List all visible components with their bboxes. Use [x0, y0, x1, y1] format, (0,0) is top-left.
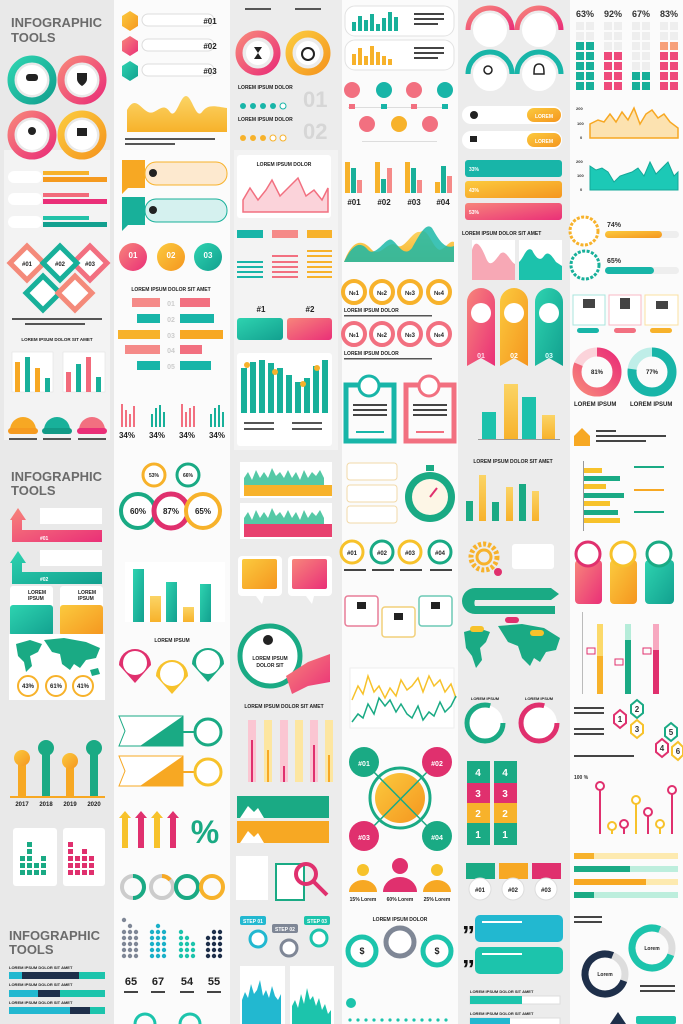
- quote cards: [462, 915, 563, 984]
- stacked numbered blocks: 4: [475, 768, 481, 779]
- world map col5: [464, 617, 560, 668]
- badges progress: [570, 217, 679, 279]
- three label cards: [466, 863, 561, 900]
- steps diagram: [240, 916, 330, 956]
- people icons: [349, 858, 451, 903]
- people icons: 25% Lorem: [424, 897, 451, 903]
- grouped bars #01-#04: #03: [407, 198, 421, 207]
- No. circles rows: №4: [434, 290, 445, 297]
- badges progress: 74%: [607, 222, 622, 229]
- hub diagram: #02: [431, 761, 443, 768]
- badges progress: 65%: [607, 258, 622, 265]
- zigzag chart card: [237, 155, 331, 218]
- arrows #01 #02: #01: [40, 536, 49, 542]
- year pillars: 2019: [63, 802, 77, 808]
- donut rings percentages: [121, 464, 220, 528]
- donuts 81% 77%: LOREM IPSUM: [574, 402, 616, 408]
- hub diagram: #04: [431, 835, 443, 842]
- bar chart col5: [466, 459, 553, 521]
- icon circles panel: [11, 59, 103, 156]
- No. circles rows: LOREM IPSUM DOLOR: [344, 351, 399, 357]
- title: infographic tools 2: [11, 469, 103, 498]
- percent squares grid: 83%: [660, 9, 678, 19]
- grouped bars #01-#04: #01: [347, 198, 361, 207]
- percentage rows: 02: [167, 317, 175, 324]
- three label cards: #01: [475, 888, 486, 894]
- icon cards three: [573, 295, 678, 333]
- stopwatch numbers: #02: [377, 551, 388, 557]
- donuts 81% 77%: 77%: [646, 370, 659, 376]
- mini bar groups 34%: 34%: [179, 431, 195, 440]
- C donuts: Lorem: [597, 972, 613, 978]
- diamonds panel: #03: [85, 262, 96, 268]
- lorem ipsum cards: LOREM: [78, 590, 96, 596]
- quote cards: ”: [462, 954, 475, 984]
- triangle ribbons with icons: [119, 716, 221, 786]
- people icons: 15% Lorem: [350, 897, 377, 903]
- segmented progress: LOREM IPSUM DOLOR SIT AMET: [470, 989, 534, 994]
- segmented bars: LOREM IPSUM DOLOR SIT AMET: [9, 982, 73, 987]
- dot columns 65 67 54 55: 55: [208, 976, 220, 988]
- donut rings percentages: 66%: [183, 473, 194, 479]
- arrows #01 #02: [10, 508, 102, 584]
- banners: 53%: [469, 210, 480, 216]
- hexagons 1-6: 5: [669, 728, 674, 737]
- circular arrows: [467, 696, 557, 741]
- stacked numbered blocks: 1: [475, 830, 481, 841]
- ribbon banners 01 02 03: [467, 288, 563, 366]
- gear icon: [471, 544, 554, 576]
- twin area charts: [462, 231, 562, 280]
- dollar rings: $: [434, 946, 440, 956]
- pin timeline: [344, 82, 453, 142]
- house icon: [574, 428, 666, 446]
- title: infographic tools 1: TOOLS: [11, 30, 56, 45]
- dollar rings: $: [359, 946, 365, 956]
- circular arrows: LOREM IPSUM: [471, 696, 500, 701]
- orange line area chart: 100: [577, 121, 584, 126]
- lollipop chart: [574, 775, 676, 834]
- dots 01 02: LOREM IPSUM DOLOR: [238, 117, 293, 123]
- year pillars: 2020: [87, 802, 101, 808]
- teal line area chart: 0: [580, 187, 583, 192]
- teal bar chart card: [237, 353, 332, 446]
- text boxes and stopwatch: [347, 463, 455, 523]
- orange line area chart: 0: [580, 135, 583, 140]
- #1 #2 cards: [237, 305, 332, 340]
- numbered circles: 01: [129, 251, 138, 260]
- lorem ipsum cards: [10, 586, 103, 636]
- mini bar groups 34%: [119, 404, 225, 440]
- dots 01 02: LOREM IPSUM DOLOR: [238, 85, 293, 91]
- No. circles rows: №3: [405, 290, 416, 297]
- vertical percentage bars: LOREM IPSUM DOLOR SIT AMET: [244, 704, 324, 710]
- bar cards col4: [345, 6, 454, 70]
- diamonds panel: [10, 246, 107, 325]
- orange line area chart: [576, 106, 678, 140]
- hexagons 1-6: [574, 700, 683, 760]
- twin area charts: LOREM IPSUM DOLOR SIT AMET: [462, 231, 541, 237]
- dot grid cards: [13, 828, 105, 886]
- dots 01 02: [238, 85, 327, 144]
- up arrows and percent sign: %: [191, 814, 219, 850]
- percentage rows: LOREM IPSUM DOLOR SIT AMET: [131, 287, 211, 293]
- banners: 43%: [469, 188, 480, 194]
- bar chart 4 bars: [478, 384, 560, 440]
- pins panel: [8, 417, 107, 440]
- segmented bars: LOREM IPSUM DOLOR SIT AMET: [9, 1000, 73, 1005]
- dollar rings: LOREM IPSUM DOLOR: [373, 917, 428, 923]
- cyan area charts: [240, 966, 334, 1024]
- stacked numbered blocks: 3: [475, 789, 481, 800]
- hub diagram: #01: [358, 761, 370, 768]
- donut rings percentages: 53%: [149, 473, 160, 479]
- title: infographic tools 1: INFOGRAPHIC: [11, 15, 103, 30]
- hexagons 1-6: 2: [635, 705, 640, 714]
- ribbon banners 01 02 03: 01: [477, 353, 485, 360]
- teal line area chart: 100: [577, 173, 584, 178]
- hexagons 1-6: 6: [676, 747, 681, 756]
- stopwatch numbers: #04: [435, 551, 446, 557]
- world map: 41%: [77, 684, 90, 690]
- year pillars: 2018: [39, 802, 53, 808]
- lorem ipsum cards: IPSUM: [28, 596, 44, 602]
- stacked numbered blocks: 3: [502, 789, 508, 800]
- donuts 81% 77%: LOREM IPSUM: [630, 402, 672, 408]
- C donuts: Lorem: [644, 946, 660, 952]
- donut rings percentages: 65%: [195, 507, 211, 516]
- ribbon banners 01 02 03: 02: [510, 353, 518, 360]
- big circle with arrow: [240, 626, 330, 694]
- diamonds panel: #02: [55, 262, 66, 268]
- dot columns 65 67 54 55: 54: [181, 976, 194, 988]
- big circle with arrow: LOREM IPSUM: [252, 656, 288, 662]
- yellow area chart: [125, 96, 227, 145]
- percentage rows: 04: [167, 348, 175, 355]
- No. circles rows: №1: [349, 290, 360, 297]
- pin markers: [119, 638, 224, 694]
- percent squares grid: 92%: [604, 9, 622, 19]
- percentage rows: 05: [167, 364, 175, 371]
- cubes list: #03: [203, 67, 217, 76]
- dots 01 02: 02: [303, 119, 327, 144]
- banners: 33%: [469, 167, 480, 173]
- mountain banners: [237, 796, 329, 843]
- timer gauges: [239, 8, 327, 72]
- horizontal bar chart col6: [583, 461, 664, 531]
- mini bar groups 34%: 34%: [119, 431, 135, 440]
- bar chart teal/orange: [125, 562, 225, 622]
- bar charts panel: [12, 337, 105, 392]
- teal line area chart: 200: [576, 159, 583, 164]
- progress bars col6: [574, 853, 678, 898]
- year pillars: 2017: [15, 802, 29, 808]
- donuts 81% 77%: [574, 352, 672, 408]
- stacked numbered blocks: 1: [502, 830, 508, 841]
- title: infographic tools 2: TOOLS: [11, 483, 56, 498]
- lorem ipsum cards: LOREM: [28, 590, 46, 596]
- stacked numbered blocks: 2: [475, 809, 481, 820]
- grouped bars #01-#04: #02: [377, 198, 391, 207]
- lollipop chart: 100 %: [574, 775, 589, 781]
- banners: [465, 160, 562, 220]
- horizontal bars panel: [8, 171, 107, 228]
- No. circles rows: [343, 281, 450, 360]
- title: infographic tools 3: INFOGRAPHIC: [9, 928, 101, 943]
- stacked numbered blocks: 4: [502, 768, 508, 779]
- stacked area charts: [240, 462, 332, 539]
- percentage rows: [118, 287, 223, 371]
- stopwatch numbers: [341, 541, 452, 571]
- title: infographic tools 3: TOOLS: [9, 942, 54, 957]
- callouts: [122, 160, 227, 231]
- three label cards: #03: [541, 888, 552, 894]
- No. circles rows: №2: [377, 290, 388, 297]
- dollar rings: [346, 917, 451, 1022]
- vertical bars with labels: [582, 612, 659, 694]
- half gauges: [468, 8, 561, 91]
- up arrows and percent sign: [119, 811, 219, 850]
- zigzag chart card: LOREM IPSUM DOLOR: [257, 162, 312, 168]
- steps diagram: STEP 03: [307, 919, 327, 925]
- diamonds panel: #01: [22, 262, 33, 268]
- bar charts panel: LOREM IPSUM DOLOR SIT AMET: [21, 337, 93, 342]
- mountain area chart: [344, 226, 454, 262]
- three label cards: #02: [508, 888, 519, 894]
- pill buttons: [462, 106, 562, 149]
- stacked numbered blocks: 2: [502, 809, 508, 820]
- dots 01 02: 01: [303, 87, 327, 112]
- percent squares grid: 63%: [576, 9, 594, 19]
- hexagons 1-6: 4: [660, 744, 665, 753]
- steps diagram: STEP 02: [275, 927, 295, 933]
- people icons: 60% Lorem: [387, 897, 414, 903]
- title: infographic tools 3: [9, 928, 101, 957]
- world map: 43%: [22, 684, 35, 690]
- hexagons 1-6: 1: [618, 715, 623, 724]
- icon pin cards col6: [575, 542, 674, 604]
- donut rings percentages: 87%: [163, 507, 179, 516]
- C donuts: [574, 916, 678, 1024]
- grouped bars #01-#04: #04: [436, 198, 450, 207]
- numbered circles: 02: [167, 251, 176, 260]
- percent squares grid: 67%: [632, 9, 650, 19]
- hexagons 1-6: 3: [635, 725, 640, 734]
- #1 #2 cards: #2: [306, 305, 315, 314]
- donuts 81% 77%: 81%: [591, 370, 604, 376]
- percentage rows: 03: [167, 333, 175, 340]
- steps diagram: STEP 01: [243, 919, 263, 925]
- teal line area chart: [576, 159, 678, 192]
- cubes list: #02: [203, 42, 217, 51]
- dot columns 65 67 54 55: 65: [125, 976, 137, 988]
- No. circles rows: LOREM IPSUM DOLOR: [344, 308, 399, 314]
- arrows #01 #02: #02: [40, 577, 49, 583]
- mini bar groups 34%: 34%: [149, 431, 165, 440]
- bar chart col5: LOREM IPSUM DOLOR SIT AMET: [473, 459, 553, 465]
- numbered circles: 03: [204, 251, 213, 260]
- big circle with arrow: DOLOR SIT: [256, 663, 284, 669]
- world map: 61%: [50, 684, 63, 690]
- clipboard magnifier: [236, 856, 327, 900]
- segmented bars: LOREM IPSUM DOLOR SIT AMET: [9, 965, 73, 970]
- No. circles rows: №4: [434, 332, 445, 339]
- icon boxes: [345, 596, 452, 637]
- hub diagram: #03: [358, 835, 370, 842]
- u-turn arrow: [462, 588, 559, 614]
- title: infographic tools 2: INFOGRAPHIC: [11, 469, 103, 484]
- year pillars: [10, 740, 105, 808]
- No. circles rows: №1: [349, 332, 360, 339]
- percentage rows: 01: [167, 301, 175, 308]
- grouped bars #01-#04: [345, 162, 452, 207]
- hub diagram: [349, 747, 452, 851]
- three column stripes: [237, 230, 332, 278]
- line chart: [350, 668, 456, 728]
- quote cards: ”: [462, 920, 475, 950]
- dot columns 65 67 54 55: [122, 918, 222, 1024]
- speech callouts: [238, 556, 332, 604]
- mini bar groups 34%: 34%: [209, 431, 225, 440]
- stopwatch numbers: #03: [405, 551, 416, 557]
- pin markers: LOREM IPSUM: [154, 638, 190, 644]
- pill buttons: LOREM: [535, 139, 553, 145]
- No. circles rows: №2: [377, 332, 388, 339]
- orange line area chart: 200: [576, 106, 583, 111]
- segmented bars: [9, 965, 105, 1014]
- cubes list: #01: [203, 17, 217, 26]
- #1 #2 cards: #1: [257, 305, 266, 314]
- stacked numbered blocks: [467, 761, 517, 845]
- numbered circles: [119, 243, 222, 271]
- segmented progress: LOREM IPSUM DOLOR SIT AMET: [470, 1011, 534, 1016]
- icon cards teal pink: [346, 376, 454, 441]
- lorem ipsum cards: IPSUM: [78, 596, 94, 602]
- stopwatch numbers: #01: [347, 551, 358, 557]
- circular arrows: LOREM IPSUM: [525, 696, 554, 701]
- pill buttons: LOREM: [535, 114, 553, 120]
- cubes list: [122, 11, 217, 81]
- ribbon banners 01 02 03: 03: [545, 353, 553, 360]
- dot columns 65 67 54 55: 67: [152, 976, 164, 988]
- gear circles: [122, 876, 223, 898]
- donut rings percentages: 60%: [130, 507, 146, 516]
- title: infographic tools 1: [11, 15, 103, 45]
- vertical percentage bars: [244, 704, 333, 782]
- percent squares grid: [576, 9, 678, 90]
- world map: [9, 634, 105, 700]
- segmented progress: [470, 989, 560, 1024]
- No. circles rows: №3: [405, 332, 416, 339]
